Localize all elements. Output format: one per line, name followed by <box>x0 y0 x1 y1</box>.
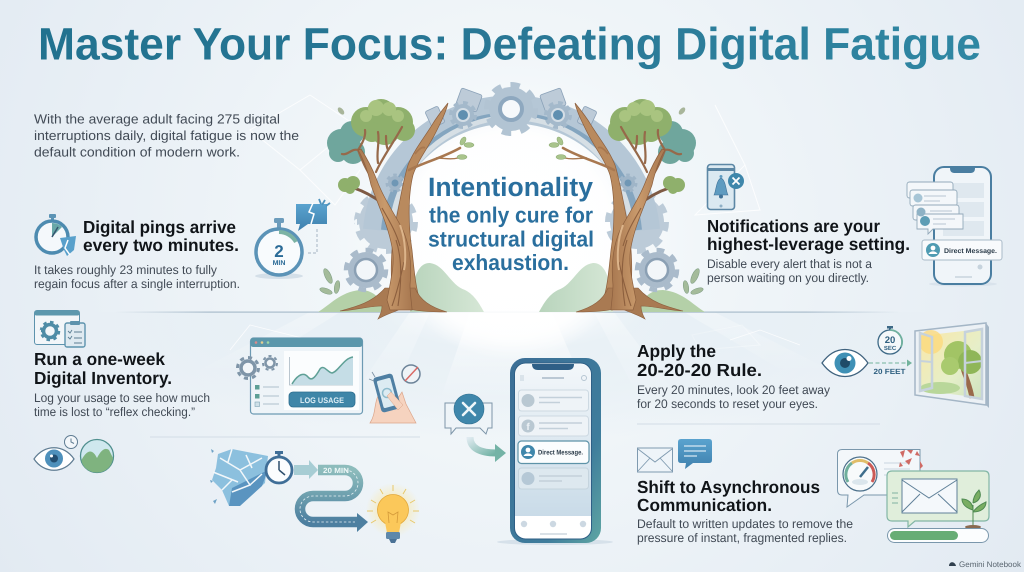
panel: 20-20-20 rule: 20-20-20 Rule. <box>637 360 762 380</box>
body text: Every 20 minutes, look 20 feet away <box>637 383 831 397</box>
body text <box>707 257 872 285</box>
icon: envelope and chat bubble <box>638 439 712 472</box>
network background lines <box>250 95 760 350</box>
body text: time is lost to “reflex checking.” <box>34 405 195 419</box>
icon: 20 sec stopwatch <box>878 326 902 354</box>
shattered glass <box>210 449 268 506</box>
icon: hand with phone <box>369 365 420 423</box>
panel: digital inventory <box>34 310 420 423</box>
icon: stopwatch small <box>36 214 76 256</box>
illustration: stress gauge to calm email <box>838 450 989 542</box>
road: 20 MIN <box>323 466 349 475</box>
road <box>294 460 368 532</box>
icon: eye with distance arrow <box>822 350 912 376</box>
panel: digital pings <box>34 199 330 291</box>
panel: asynchronous communication <box>637 439 989 545</box>
icon: eye, clock and landscape <box>34 436 114 472</box>
icon: phone with muted bell <box>708 164 744 210</box>
title: Master Your Focus: Defeating Digital Fatigue <box>38 18 981 70</box>
floor and light rays <box>82 312 942 440</box>
center glow <box>386 110 636 360</box>
illustration: log usage dashboard: LOG USAGE <box>300 396 345 405</box>
arrow <box>470 437 506 462</box>
icon: settings window and clipboard <box>34 310 85 347</box>
chat bubble with x <box>445 394 492 434</box>
stopwatch <box>266 451 292 483</box>
heading: Apply the <box>637 341 716 361</box>
center message: structural digital <box>428 226 594 252</box>
illustration: phone with filtered alerts: Direct Message. <box>944 248 997 255</box>
panel: asynchronous communication: Communication. <box>637 495 772 515</box>
right tree <box>549 99 704 319</box>
body text: Disable every alert that is not a <box>707 257 872 271</box>
top gears <box>425 85 597 133</box>
heading: Digital pings arrive <box>83 217 236 237</box>
body text: Log your usage to see how much <box>34 391 210 405</box>
body text: for 20 seconds to reset your eyes. <box>637 397 818 411</box>
body text <box>637 517 853 545</box>
arch ring <box>377 109 646 230</box>
body text: pressure of instant, fragmented replies. <box>637 531 847 545</box>
intro text <box>34 112 299 160</box>
heading: Run a one-week <box>34 349 165 369</box>
center message <box>428 172 594 275</box>
body text: person waiting on you directly. <box>707 271 869 285</box>
illustration: phone with filtered alerts <box>907 167 1002 286</box>
body text: regain focus after a single interruption. <box>34 277 240 291</box>
intro text: default condition of modern work. <box>34 144 240 160</box>
icon: 20 sec stopwatch: SEC <box>884 345 897 352</box>
icon: 2 min stopwatch: 2 <box>274 242 284 261</box>
side small gears <box>387 175 636 191</box>
icon: 2 min stopwatch: MIN <box>273 260 285 267</box>
panel: notifications: highest-leverage setting. <box>707 234 910 254</box>
icon: 2 min stopwatch <box>255 218 303 279</box>
panel: digital pings: every two minutes. <box>83 235 239 255</box>
lightbulb <box>366 483 420 543</box>
body text <box>637 383 831 411</box>
center message: exhaustion. <box>452 250 569 275</box>
panel: notifications <box>707 164 1002 286</box>
center phone with direct message <box>445 358 613 545</box>
icon: broken chat bubble <box>296 199 330 253</box>
bushes <box>318 263 705 312</box>
lower gears <box>346 193 677 290</box>
intro text: With the average adult facing 275 digital <box>34 112 280 126</box>
panel: digital inventory: Digital Inventory. <box>34 368 172 388</box>
illustration: log usage dashboard <box>238 338 362 414</box>
body text <box>34 391 210 419</box>
central gear arch and trees <box>318 85 705 360</box>
phone: Direct Message. <box>538 450 583 456</box>
illustration: broken focus to 20 minute road to idea <box>210 449 420 543</box>
intro text: interruptions daily, digital fatigue is now the <box>34 128 299 143</box>
icon: eye with distance arrow: 20 FEET <box>874 367 906 376</box>
left tree <box>319 99 474 319</box>
panel: 20-20-20 rule <box>637 323 989 411</box>
center message: Intentionality <box>428 172 593 202</box>
heading: Notifications are your <box>707 216 880 236</box>
body text: Default to written updates to remove the <box>637 517 853 531</box>
phone: f <box>526 422 530 433</box>
phone <box>497 358 613 545</box>
body text: It takes roughly 23 minutes to fully <box>34 263 218 277</box>
body text <box>34 263 240 291</box>
icon: 20 sec stopwatch: 20 <box>885 335 895 346</box>
footer wordmark: Gemini Notebook <box>959 560 1022 569</box>
center message: the only cure for <box>429 202 593 228</box>
heading: Shift to Asynchronous <box>637 477 820 497</box>
illustration: open window with tree <box>915 323 989 408</box>
